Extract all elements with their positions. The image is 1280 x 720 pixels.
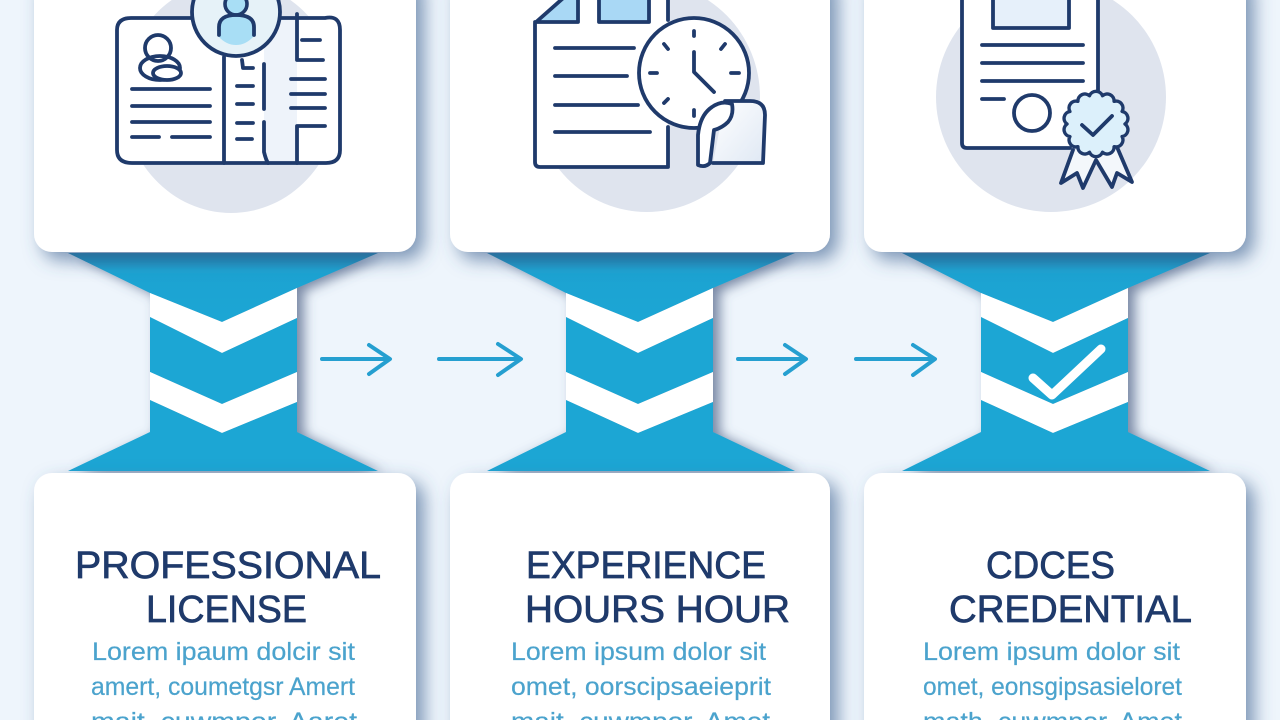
- arrow: step 2 to 3, first: [738, 345, 806, 374]
- heading: experience hours: HOURS HOUR: [525, 589, 790, 631]
- arrow: step 1 to 2, first: [322, 345, 390, 374]
- icon: license document with person: [117, 0, 340, 163]
- connector: step 2 chevrons: [487, 253, 795, 471]
- text block: professional license description: amert, coumetgsr Amert: [91, 673, 355, 701]
- text block: experience hours description: omet, oorscipsaeieprit: [511, 673, 771, 701]
- heading: CDCES credential: CREDENTIAL: [949, 589, 1192, 631]
- connector: step 3 chevrons with check: [902, 253, 1210, 471]
- connector: step 1 chevrons: [68, 253, 378, 471]
- heading: professional license: PROFESSIONAL: [75, 545, 381, 587]
- panel: professional license icon card: [34, 0, 416, 252]
- icon: certificate with ribbon seal: [962, 0, 1132, 188]
- text block: experience hours description: Lorem ipsum dolor sit: [511, 638, 766, 666]
- arrow: step 1 to 2, second: [439, 344, 521, 375]
- text block: credential description: [923, 638, 1182, 720]
- heading: professional license: [75, 545, 381, 631]
- arrow: step 2 to 3, second: [856, 345, 935, 375]
- panel: credential text card: [864, 473, 1246, 720]
- text block: professional license description: Lorem ipaum dolcir sit: [92, 638, 355, 666]
- panel: professional license text card: [34, 473, 416, 720]
- heading: experience hours: EXPERIENCE: [526, 545, 766, 587]
- text block: credential description: omet, eonsgipsasieloret: [923, 673, 1182, 701]
- text block: experience hours description: [511, 638, 771, 720]
- panel: credential icon card: [864, 0, 1246, 252]
- heading: CDCES credential: [949, 545, 1192, 631]
- icon: document with clock: [535, 0, 765, 167]
- panel: experience hours icon card: [450, 0, 830, 252]
- heading: professional license: LICENSE: [146, 589, 307, 631]
- text block: professional license description: [91, 638, 357, 720]
- panel: experience hours text card: [450, 473, 830, 720]
- text block: credential description: Lorem ipsum dolor sit: [923, 638, 1180, 666]
- heading: CDCES credential: CDCES: [986, 545, 1115, 587]
- heading: experience hours: [525, 545, 790, 631]
